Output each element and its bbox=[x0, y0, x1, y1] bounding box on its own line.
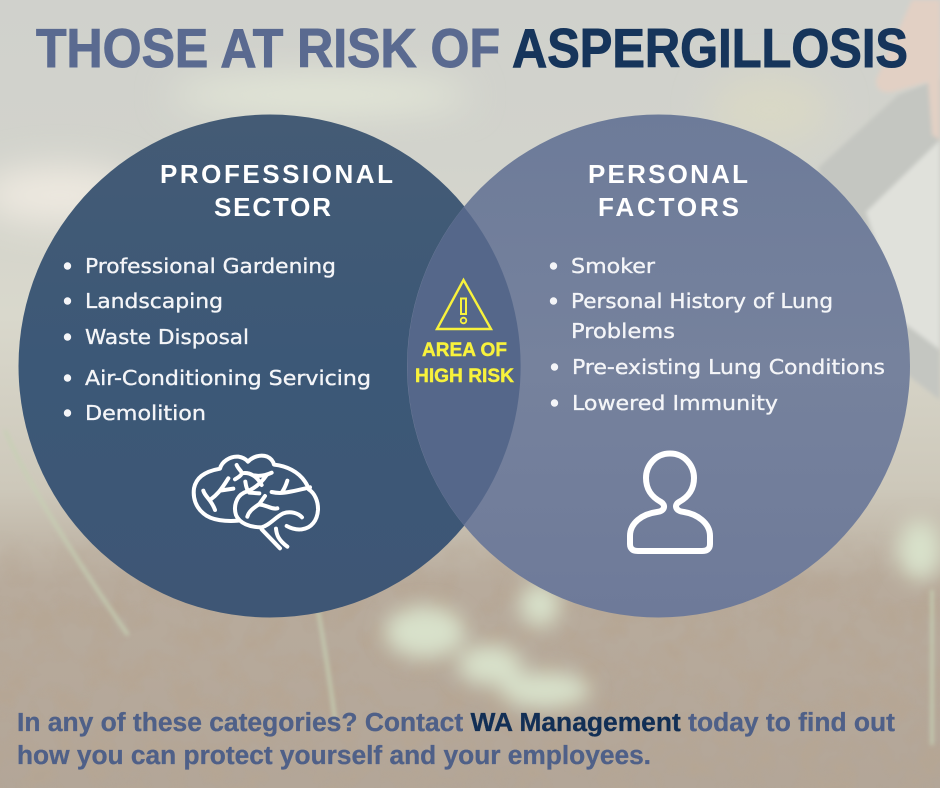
title: THOSE AT RISK OF bbox=[36, 17, 500, 79]
heading: professional sector: SECTOR bbox=[214, 192, 331, 222]
callout: area of high risk: HIGH RISK bbox=[415, 365, 514, 387]
watering can bbox=[818, 78, 940, 400]
callout: area of high risk: AREA OF bbox=[422, 339, 507, 361]
heading: personal factors: FACTORS bbox=[598, 192, 739, 222]
heading: professional sector bbox=[160, 159, 393, 222]
heading: professional sector: PROFESSIONAL bbox=[160, 159, 393, 189]
list: professional sector items: Demolition bbox=[85, 401, 206, 425]
hand bbox=[876, 0, 940, 140]
list: personal factors items: Smoker bbox=[571, 254, 656, 278]
list: personal factors items: Lowered Immunity bbox=[572, 391, 778, 415]
heading: personal factors bbox=[588, 159, 748, 222]
callout: area of high risk bbox=[415, 339, 514, 387]
list: professional sector items: Landscaping bbox=[85, 289, 223, 313]
icon: warning triangle bbox=[437, 280, 491, 329]
list: professional sector items: Air-Conditioning Servicing bbox=[85, 366, 371, 390]
list: personal factors items bbox=[550, 254, 885, 415]
heading: personal factors: PERSONAL bbox=[588, 159, 748, 189]
panel: personal factors circle bbox=[407, 114, 910, 618]
list: personal factors items: Pre-existing Lung Conditions bbox=[572, 355, 885, 379]
panel: overlap lens bbox=[407, 207, 521, 525]
list: professional sector items: Waste Disposal bbox=[85, 325, 249, 349]
footer text bbox=[17, 709, 896, 770]
icon: brain bbox=[194, 456, 318, 548]
title bbox=[36, 17, 908, 79]
icon: person bbox=[630, 454, 710, 551]
list: professional sector items bbox=[64, 254, 371, 425]
list: personal factors items: Personal History of Lung bbox=[571, 289, 833, 313]
list: professional sector items: Professional Gardening bbox=[85, 254, 336, 278]
footer text: how you can protect yourself and your employees. bbox=[17, 742, 651, 770]
list: personal factors items: Problems bbox=[571, 319, 675, 343]
footer text: In any of these categories? Contact WA Management today to find out bbox=[17, 709, 896, 737]
panel: professional sector circle bbox=[18, 114, 522, 618]
